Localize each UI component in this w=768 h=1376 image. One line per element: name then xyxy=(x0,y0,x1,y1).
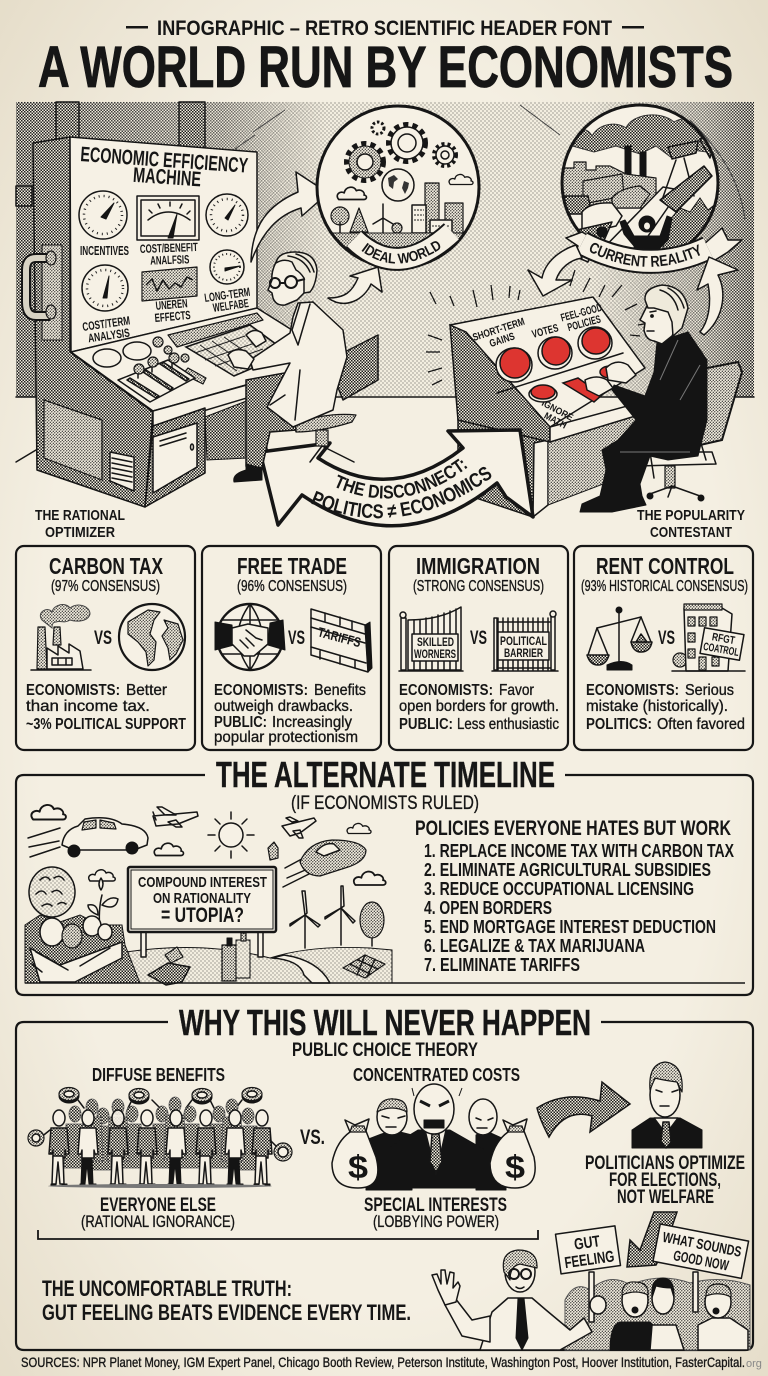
clouds xyxy=(337,187,366,200)
left caption: THE RATIONAL xyxy=(35,507,125,524)
vs: VS xyxy=(94,628,112,649)
gauge labels: COST/TERM xyxy=(81,313,131,334)
vent xyxy=(110,452,134,491)
icon: apartment block xyxy=(672,604,745,671)
money bags: $ xyxy=(505,1149,525,1185)
button labels: VOTES xyxy=(531,322,560,341)
heading: THE ALTERNATE TIMELINE xyxy=(216,754,555,795)
meter xyxy=(137,196,199,240)
icon: tariffs wall: TARIFFS xyxy=(316,624,363,650)
card text: POLITICS: xyxy=(586,716,652,733)
card text xyxy=(586,682,745,733)
card text: outweigh drawbacks. xyxy=(214,698,353,715)
policies list: 6. LEGALIZE & TAX MARIJUANA xyxy=(424,936,645,956)
chair xyxy=(293,335,378,462)
policies list: 4. OPEN BORDERS xyxy=(424,898,552,918)
politicians caption: FOR ELECTIONS, xyxy=(609,1170,721,1191)
globe xyxy=(382,169,414,201)
vegetable crate xyxy=(30,916,122,982)
console desk xyxy=(71,308,292,411)
head xyxy=(640,285,688,344)
disconnect arrow: POLITICS ≠ ECONOMICS xyxy=(311,466,492,518)
special interests caption: SPECIAL INTERESTS xyxy=(364,1195,507,1216)
button labels: IGNORE xyxy=(540,398,575,424)
billboard xyxy=(128,867,276,957)
sign: gut feeling: FEELING xyxy=(564,1248,615,1272)
card text: Often favored xyxy=(657,716,745,733)
sliders xyxy=(118,353,195,402)
foliage xyxy=(25,915,140,983)
protest crowd xyxy=(432,1224,750,1350)
front crowd xyxy=(48,1110,272,1188)
gauge labels: ANALFSIS xyxy=(150,252,189,268)
policies list xyxy=(424,841,734,975)
pipes xyxy=(16,102,205,206)
key strip xyxy=(168,313,263,347)
icon: open gate: WORNERS xyxy=(414,649,456,661)
icon: apartment block: RFGT xyxy=(711,631,736,647)
back crowd xyxy=(64,1097,259,1170)
ground xyxy=(333,232,462,247)
card text: than income tax. xyxy=(26,698,150,715)
icon: barrier gate: BARRIER xyxy=(504,648,544,660)
black suit xyxy=(580,332,707,512)
gauge labels xyxy=(80,240,253,346)
ideal world ribbon: IDEAL WORLD xyxy=(362,241,440,264)
ideal world globe xyxy=(316,104,480,271)
crane xyxy=(662,138,712,198)
arrow to politician xyxy=(537,1082,630,1137)
wind turbines xyxy=(290,886,355,948)
tower xyxy=(33,137,153,507)
right caption xyxy=(637,507,745,541)
current reality globe xyxy=(560,104,743,274)
panel: rent control xyxy=(574,546,753,750)
card text: Favor xyxy=(499,682,535,699)
panel: free trade xyxy=(202,546,381,750)
trousers xyxy=(246,372,296,468)
gauge: welfare xyxy=(210,250,244,284)
icon: open gate xyxy=(399,607,463,671)
consensus: (97% CONSENSUS) xyxy=(51,578,160,595)
politician at console xyxy=(580,285,742,512)
icon: tariffs wall xyxy=(311,609,372,672)
lower hatch xyxy=(44,400,102,480)
side handle xyxy=(26,245,62,340)
gauge labels: LONG-TERM xyxy=(203,285,251,305)
rubble xyxy=(148,963,190,985)
button labels xyxy=(471,302,606,432)
truth statement: GUT FEELING BEATS EVIDENCE EVERY TIME. xyxy=(42,1300,411,1325)
card text xyxy=(399,682,559,733)
panel: immigration xyxy=(389,546,568,750)
stacks xyxy=(625,146,646,180)
panel title: MACHINE xyxy=(132,164,202,191)
icon: barrier gate xyxy=(492,611,558,671)
cabinet door xyxy=(153,423,197,493)
bottles xyxy=(222,933,250,981)
left caption xyxy=(35,507,125,541)
disconnect arrow xyxy=(262,428,535,528)
console front xyxy=(533,414,640,517)
policies list: 7. ELIMINATE TARIFFS xyxy=(424,955,580,975)
panel title: ECONOMIC EFFICIENCY xyxy=(80,143,249,178)
gauge: incentives xyxy=(79,191,127,239)
icon: scales xyxy=(587,607,652,670)
money bags xyxy=(332,1119,535,1188)
vs: VS. xyxy=(300,1126,325,1149)
line chart xyxy=(142,267,197,301)
special interests caption: (LOBBYING POWER) xyxy=(373,1212,499,1231)
landscape xyxy=(25,932,392,983)
clouds xyxy=(31,805,386,885)
flying saucer car xyxy=(283,840,366,887)
small plane xyxy=(282,817,316,838)
chair xyxy=(632,362,742,501)
card text: Increasingly xyxy=(272,714,352,731)
icon: barrier gate: POLITICAL xyxy=(500,636,547,648)
lab coat xyxy=(250,302,347,427)
billboard: = UTOPIA? xyxy=(161,904,244,927)
sign: what sounds good now: GOOD NOW xyxy=(672,1248,730,1275)
card text: Better xyxy=(126,682,168,699)
ground rule xyxy=(25,982,745,984)
panel: carbon tax xyxy=(16,546,195,750)
button labels: FEEL-GOOD xyxy=(560,302,603,324)
button labels: GAINS xyxy=(488,331,516,350)
arrow to ideal world xyxy=(251,172,328,262)
icon: open gate: SKILLED xyxy=(417,637,454,649)
everyone else caption xyxy=(81,1195,235,1231)
truth statement xyxy=(42,1276,411,1325)
gauge labels: EFFECTS xyxy=(154,308,191,325)
current reality ribbon: CURRENT REALITY xyxy=(590,242,700,267)
consensus: (STRONG CONSENSUS) xyxy=(413,578,544,595)
special interests caption xyxy=(364,1195,507,1231)
sign: what sounds good now: WHAT SOUNDS xyxy=(661,1230,743,1261)
card text: ~3% POLITICAL SUPPORT xyxy=(26,716,186,733)
card title: CARBON TAX xyxy=(49,553,163,579)
solar panel xyxy=(343,955,385,978)
card text: Benefits xyxy=(314,682,366,699)
dials xyxy=(93,337,206,384)
smoke xyxy=(572,114,706,158)
panel: alternate timeline xyxy=(16,754,753,995)
protest crowd xyxy=(620,197,714,249)
main man xyxy=(385,1084,485,1188)
path xyxy=(272,955,330,983)
card text: ECONOMISTS: xyxy=(26,682,120,699)
right caption: THE POPULARITY xyxy=(637,507,745,524)
machine xyxy=(26,137,292,507)
politician xyxy=(632,1062,702,1148)
side men xyxy=(366,1099,506,1190)
gears xyxy=(347,122,456,180)
sources: org xyxy=(746,1358,762,1370)
politicians caption xyxy=(585,1153,745,1208)
kicker: INFOGRAPHIC – RETRO SCIENTIFIC HEADER FONT xyxy=(157,17,612,40)
billboard: ON RATIONALITY xyxy=(153,890,251,907)
gauge labels: INCENTIVES xyxy=(80,244,129,258)
everyone else caption: (RATIONAL IGNORANCE) xyxy=(81,1212,235,1231)
arrow to politician console xyxy=(528,245,582,296)
vs: VS xyxy=(658,628,675,649)
card text: mistake (historically). xyxy=(586,698,728,715)
money bags: $ xyxy=(348,1149,368,1185)
panel frame xyxy=(16,1022,753,1350)
current reality ribbon xyxy=(565,227,743,274)
gauge labels: COST/BENEFIT xyxy=(140,240,199,256)
ideal world ribbon xyxy=(346,223,459,271)
protesters xyxy=(610,1278,748,1350)
panel title xyxy=(78,143,249,195)
hand coins xyxy=(28,1130,292,1161)
subheading: PUBLIC CHOICE THEORY xyxy=(292,1040,478,1061)
red buttons xyxy=(496,327,620,402)
crowd silhouettes xyxy=(565,1278,750,1350)
panel: why this will never happen xyxy=(16,1002,753,1350)
road xyxy=(609,186,674,242)
skyline xyxy=(562,162,656,208)
hero illustration xyxy=(15,101,755,541)
knee space shadow xyxy=(205,395,268,460)
button labels: POLICIES xyxy=(566,314,602,334)
card title: IMMIGRATION xyxy=(416,553,540,579)
wall halftone xyxy=(16,102,754,462)
everyone else caption: EVERYONE ELSE xyxy=(100,1195,216,1216)
card text: PUBLIC: xyxy=(399,716,453,733)
illustration: utopia scene xyxy=(25,805,392,985)
head xyxy=(268,256,308,305)
keyboard xyxy=(186,325,288,376)
gauge labels: UNEREN xyxy=(155,296,188,313)
sign: what sounds good now xyxy=(653,1224,749,1312)
card text: Serious xyxy=(685,682,734,699)
desk lip xyxy=(550,402,642,442)
gauge: term xyxy=(82,265,128,311)
billboard: COMPOUND INTEREST xyxy=(138,874,267,891)
bracket xyxy=(38,1230,538,1239)
card text: open borders for growth. xyxy=(399,698,559,715)
gauge: right xyxy=(206,194,248,236)
city xyxy=(412,183,463,233)
sloped panel xyxy=(450,297,645,427)
icon: globe xyxy=(119,604,185,670)
glasses xyxy=(270,276,305,288)
special interests illustration xyxy=(332,1084,535,1190)
scrap xyxy=(268,842,278,860)
diffuse benefits: DIFFUSE BENEFITS xyxy=(92,1065,225,1085)
consensus: (96% CONSENSUS) xyxy=(237,578,347,595)
arrow down xyxy=(627,1212,677,1267)
subheading: (IF ECONOMISTS RULED) xyxy=(291,793,479,814)
card text: PUBLIC: xyxy=(214,714,267,731)
trees xyxy=(29,867,384,946)
desk front xyxy=(153,373,290,426)
burst lines xyxy=(426,270,650,385)
right caption: CONTESTANT xyxy=(650,524,732,541)
policies list: 3. REDUCE OCCUPATIONAL LICENSING xyxy=(424,879,694,899)
truth statement: THE UNCOMFORTABLE TRUTH: xyxy=(42,1276,292,1301)
vs: VS xyxy=(288,628,305,649)
card text xyxy=(26,682,186,733)
icon: apartment block: COATROL xyxy=(702,641,740,659)
panel frame xyxy=(16,775,753,995)
sign: gut feeling xyxy=(555,1226,620,1322)
politicians caption: NOT WELFARE xyxy=(617,1187,714,1208)
console base xyxy=(458,418,550,517)
sign: gut feeling: GUT xyxy=(573,1233,601,1254)
concentrated costs: CONCENTRATED COSTS xyxy=(353,1065,520,1085)
trees and turbine xyxy=(331,204,402,233)
politician console xyxy=(450,297,645,517)
icon: factory xyxy=(31,605,91,670)
card text xyxy=(214,682,366,746)
button labels: MATH xyxy=(542,411,568,432)
card text: ECONOMISTS: xyxy=(586,682,679,699)
card title: FREE TRADE xyxy=(237,553,347,579)
left caption: OPTIMIZER xyxy=(45,524,115,541)
scientist waving xyxy=(432,1250,606,1350)
console side wedge xyxy=(450,325,550,442)
coins xyxy=(59,1088,262,1108)
card text: ECONOMISTS: xyxy=(214,682,308,699)
card text: ECONOMISTS: xyxy=(399,682,493,699)
vs: VS xyxy=(470,628,487,649)
icon: handshake globe xyxy=(215,604,285,670)
shoe xyxy=(234,464,262,482)
plane xyxy=(153,807,198,827)
scientist xyxy=(228,252,378,482)
header xyxy=(38,17,733,100)
hands xyxy=(585,362,636,396)
gauge labels: ANALYSIS xyxy=(87,326,131,345)
arrow to current reality xyxy=(697,257,738,335)
control panel xyxy=(70,137,257,352)
flying car xyxy=(28,818,148,857)
hands xyxy=(228,330,266,369)
arrow from ideal world xyxy=(328,267,382,303)
sun xyxy=(208,812,254,858)
card text: popular protectionism xyxy=(214,729,358,746)
gauge labels: WELFABE xyxy=(212,296,250,315)
button labels: SHORT-TERM xyxy=(471,316,526,344)
heading: WHY THIS WILL NEVER HAPPEN xyxy=(179,1002,591,1043)
disconnect text: THE DISCONNECT: xyxy=(336,458,468,499)
traffic xyxy=(564,173,651,240)
broken beam xyxy=(660,166,712,212)
card text: Less enthusiastic xyxy=(457,716,559,733)
